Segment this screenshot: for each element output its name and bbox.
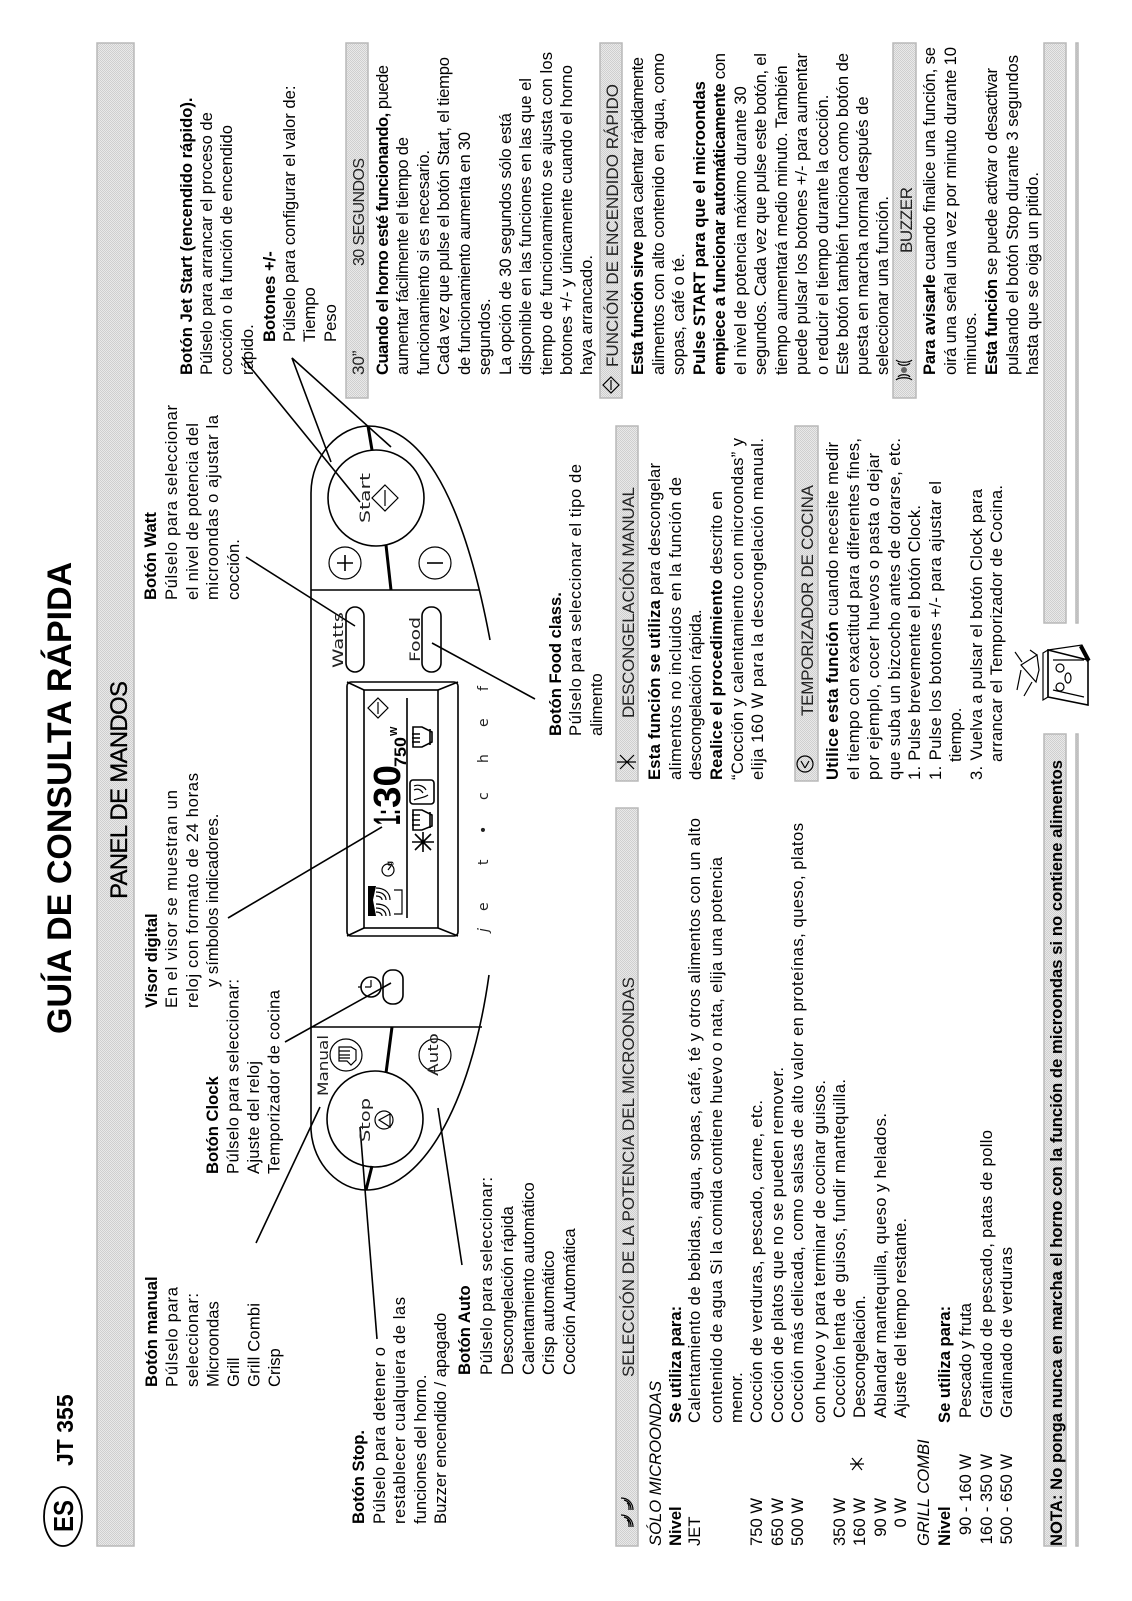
heading: panel de mandos: PANEL DE MANDOS (106, 681, 133, 899)
panel labels (316, 472, 442, 1142)
block: boton food class: Botón Food class. (546, 592, 565, 736)
text: temporizador de cocina: 1. Pulse brevemente el botón Clock. (905, 505, 924, 780)
table: solo microondas: 650 W (768, 1498, 787, 1546)
text: temporizador de cocina: el tiempo con exactitud para diferentes fines, (844, 438, 863, 780)
leader: boton manual (256, 1107, 320, 1243)
text: 30 segundos (373, 52, 596, 375)
section bar: seleccion de la potencia (616, 808, 638, 1546)
table: solo microondas (646, 818, 910, 1546)
manual button (330, 1039, 362, 1071)
text: descongelacion manual: elija 160 W para la descongelación manual. (748, 438, 767, 780)
block: boton auto: Cocción Automática (560, 1228, 579, 1375)
table: grill combi: Gratinado de pescado, patas de pollo (977, 1130, 996, 1418)
text: 30 segundos: Cuando el horno esté funcionando, puede (373, 65, 392, 375)
table: solo microondas: 90 W (871, 1498, 890, 1537)
brand letters on panel: h (476, 754, 492, 763)
display: dish icon left (412, 810, 432, 830)
leader: boton auto (438, 1108, 462, 1265)
text: temporizador de cocina: arrancar el Temporizador de Cocina. (987, 485, 1006, 762)
table: solo microondas: 500 W (788, 1498, 807, 1546)
leader: boton food (432, 643, 535, 699)
icon: clock in section bar (797, 756, 813, 772)
text: 30 segundos: La opción de 30 segundos sólo está (496, 112, 515, 375)
section heading: 30 segundos: 30” (349, 350, 368, 375)
block: boton auto: Calentamiento automático (519, 1182, 538, 1375)
table: solo microondas: contenido de agua Si la comida contiene huevo o nata, elija una potencia (707, 856, 726, 1423)
section heading: 30 segundos: 30 SEGUNDOS (351, 158, 368, 266)
table: solo microondas: 350 W (830, 1498, 849, 1546)
table: solo microondas: Descongelación. (850, 1295, 869, 1418)
icon: defrost asterisk in section bar (617, 755, 636, 769)
block: boton manual: seleccionar: (183, 1293, 202, 1387)
table: grill combi: Nivel (935, 1506, 954, 1546)
text: buzzer: minutos. (961, 312, 980, 375)
table: solo microondas: Cocción más delicada, como salsas de alto valor en proteínas, queso, platos (788, 823, 807, 1423)
panel labels: Start (358, 472, 374, 523)
block: boton clock: Botón Clock (203, 1076, 222, 1174)
control panel diagram (228, 357, 535, 1339)
table: grill combi: 500 - 650 W (997, 1454, 1016, 1544)
block: visor digital: y símbolos indicadores. (203, 814, 222, 987)
block: boton auto: Púlselo para seleccionar: (477, 1177, 496, 1375)
note: NOTA: No ponga nunca en marcha el horno con la función de microondas si no contiene alimentos (1047, 760, 1066, 1546)
display readout: W (389, 726, 400, 736)
text: temporizador de cocina: 3. Vuelva a pulsar el botón Clock para (967, 488, 986, 780)
section heading: 30 segundos (349, 158, 368, 375)
table: grill combi: GRILL COMBI (914, 1439, 933, 1546)
text: funcion de encendido rapido: Esta función sirve para calentar rápidamente (628, 57, 647, 375)
table: solo microondas: Calentamiento de bebidas, agua, sopas, café, té y otros alimentos con un alto (685, 818, 704, 1423)
plus button (329, 547, 361, 579)
thin stripe: lower segment (1076, 734, 1078, 1546)
block: boton food class: alimento (587, 673, 606, 736)
display readout: 1: (367, 809, 409, 825)
block: botones mas menos: Botones +/- (260, 251, 279, 342)
section bar: buzzer (893, 43, 916, 398)
block: botones mas menos: Tiempo (300, 287, 319, 342)
block: boton watt: microondas o ajustar la (203, 414, 222, 600)
note bar: upper segment (1044, 43, 1066, 623)
block: boton auto (455, 1177, 579, 1375)
header bar: panel de mandos (97, 43, 134, 1546)
block: boton stop: funciones del horno. (411, 1375, 430, 1524)
text: 30 segundos: tiempo de funcionamiento se ajusta con los (537, 52, 556, 375)
table: solo microondas: 750 W (747, 1498, 766, 1546)
icon: buzzer in section bar (896, 360, 912, 380)
text: descongelacion manual (645, 437, 767, 780)
block: boton stop: Buzzer encendido / apagado (431, 1313, 450, 1524)
block: boton jet start: Púlselo para arrancar el proceso de (197, 112, 216, 375)
table: solo microondas: Cocción de verduras, pescado, carne, etc. (747, 1100, 766, 1423)
title: GUÍA DE CONSULTA RÁPIDA (41, 562, 79, 1034)
block: visor digital (142, 773, 222, 1008)
text: funcion de encendido rapido: segundos. Cada vez que pulse este botón, el (751, 53, 770, 375)
block: boton manual: Crisp (265, 1348, 284, 1387)
text: buzzer: oirá una señal una vez por minuto durante 10 (941, 47, 960, 375)
text: 30 segundos: aumentar fácilmente el tiempo de (393, 137, 412, 375)
brand letters on panel: j (476, 928, 492, 934)
panel outline (311, 426, 490, 1190)
block: boton manual (142, 1276, 284, 1387)
text: funcion de encendido rapido: empiece a funcionar automáticamente con (710, 53, 729, 375)
text: temporizador de cocina: Utilice esta función cuando necesite medir (823, 442, 842, 780)
text: buzzer (920, 47, 1042, 375)
text: 30 segundos: Cada vez que pulse el botón Start, el tiempo (434, 57, 453, 375)
display readout: g (385, 861, 394, 866)
table: solo microondas: Ajuste del tiempo restante. (891, 1218, 910, 1418)
brand letters on panel: e (476, 902, 492, 911)
block: boton clock (203, 979, 284, 1174)
block: boton manual: Grill (224, 1358, 243, 1387)
section heading: seleccion de la potencia: SELECCIÓN DE LA POTENCIA DEL MICROONDAS (619, 977, 638, 1377)
block: visor digital: Visor digital (142, 913, 161, 1008)
language badge ES (44, 1487, 82, 1546)
table: solo microondas: Se utiliza para: (666, 1306, 685, 1423)
text: funcion de encendido rapido: Este botón también funciona como botón de (833, 53, 852, 375)
text: buzzer: Para avisarle cuando finalice una función, se (920, 47, 939, 375)
block: boton jet start: cocción o la función de encendido (217, 125, 236, 375)
table: solo microondas: con huevo y para terminar de cocinar guisos. (810, 1080, 829, 1423)
table: solo microondas: menor. (727, 1372, 746, 1423)
panel labels: Stop (358, 1098, 374, 1142)
block: visor digital: En el visor se muestran un (162, 790, 181, 1008)
panel labels: Manual (316, 1035, 332, 1096)
block: visor digital: reloj con formato de 24 horas (183, 773, 202, 1008)
text: funcion de encendido rapido: o reducir el tiempo durante la cocción. (813, 95, 832, 375)
panel labels: Watts (331, 612, 347, 668)
text: descongelacion manual: Realice el procedimiento descrito en (707, 491, 726, 780)
text: buzzer: pulsando el botón Stop durante 3 segundos (1003, 55, 1022, 375)
panel labels: Food (408, 617, 424, 662)
icon: microwave with book (1015, 645, 1090, 705)
block: boton clock: Temporizador de cocina (264, 989, 284, 1174)
language code ES: ES (48, 1500, 79, 1532)
text: funcion de encendido rapido: alimentos con alto contenido en agua, como (649, 53, 668, 375)
block: botones mas menos (260, 86, 340, 342)
block: botones mas menos: Peso (321, 304, 340, 342)
text: 30 segundos: de funcionamiento aumenta en 30 (455, 132, 474, 375)
section bar: descongelacion manual (616, 426, 638, 781)
block: boton watt: el nivel de potencia del (183, 423, 202, 600)
food button (422, 607, 441, 672)
block: boton manual: Microondas (204, 1301, 222, 1387)
text: funcion de encendido rapido (628, 53, 892, 375)
text: buzzer: Esta función se puede activar o desactivar (982, 68, 1001, 375)
block: boton manual: Púlselo para (162, 1286, 182, 1387)
brand letters on panel: c (476, 792, 492, 800)
brand letters on panel: • (476, 826, 492, 834)
text: funcion de encendido rapido: seleccionar una función. (873, 196, 892, 375)
block: boton clock: Púlselo para seleccionar: (224, 979, 242, 1174)
leader: boton jet start (242, 357, 360, 502)
display: microwave box icon (410, 780, 434, 804)
block: boton watt (141, 405, 243, 600)
leader: visor digital (228, 827, 382, 918)
table: solo microondas: Nivel (666, 1506, 685, 1546)
icon: waves in section bar (621, 1498, 633, 1527)
block: boton jet start: Botón Jet Start (encendido rápido). (177, 98, 196, 375)
brand letters on panel: e (476, 718, 492, 727)
display readout: 750 (391, 737, 410, 767)
brand letters on panel: f (476, 685, 492, 691)
display readout: 30 (367, 765, 409, 808)
text: descongelacion manual: “Cocción y calentamiento con microondas” y (728, 437, 747, 780)
text: descongelacion manual: alimentos no incluidos en la función de (666, 477, 685, 780)
minus button (419, 547, 451, 579)
display window (347, 682, 458, 936)
table: solo microondas: Ablandar mantequilla, queso y helados. (871, 1113, 890, 1418)
auto button (419, 1039, 451, 1071)
text: 30 segundos: segundos. (475, 298, 494, 375)
block: botones mas menos: Púlselo para configurar el valor de: (280, 86, 299, 342)
block: boton food class: Púlselo para seleccionar el tipo de (566, 464, 585, 736)
text: funcion de encendido rapido: puesta en marcha normal después de (853, 96, 872, 375)
block: boton jet start (177, 98, 257, 375)
table: grill combi: Se utiliza para: (935, 1306, 954, 1423)
note bar: lower segment (1044, 734, 1066, 1546)
table: solo microondas: Cocción lenta de guisos, fundir mantequilla. (830, 1079, 849, 1418)
section bar: funcion de encendido rapido (600, 43, 622, 398)
text: descongelacion manual: descongelación rápida. (686, 609, 705, 780)
text: buzzer: hasta que se oiga un pitido. (1023, 172, 1042, 375)
block: boton watt: Botón Watt (141, 512, 160, 600)
section bar: temporizador de cocina (795, 426, 818, 781)
section heading: funcion de encendido rapido: FUNCIÓN DE ENCENDIDO RÁPIDO (603, 84, 622, 367)
block: boton stop: restablecer cualquiera de las (390, 1297, 409, 1524)
leader: botones mas menos (292, 358, 391, 462)
block: boton manual: Grill Combi (244, 1303, 264, 1387)
table: grill combi (914, 1130, 1016, 1546)
section heading: buzzer: BUZZER (897, 187, 916, 253)
display readout (367, 726, 410, 866)
leader: boton watt (246, 557, 355, 626)
icon: start diamond in section bar (603, 377, 619, 393)
block: boton watt: cocción. (224, 539, 243, 600)
text: temporizador de cocina (823, 438, 1006, 780)
section bar: 30 segundos (346, 43, 368, 398)
block: boton manual: Botón manual (142, 1276, 161, 1387)
icon: defrost asterisk in table (850, 1458, 864, 1470)
text: descongelacion manual: Esta función se utiliza para descongelar (645, 463, 664, 780)
display: waves icon (368, 886, 402, 916)
text: temporizador de cocina: por ejemplo, cocer huevos o pasta o dejar (864, 453, 883, 780)
table: solo microondas: SÓLO MICROONDAS (646, 1381, 665, 1546)
text: 30 segundos: disponible en las funciones en las que el (516, 78, 535, 375)
text: funcion de encendido rapido: Pulse START para que el microondas (690, 81, 709, 375)
panel labels: Auto (426, 1033, 442, 1076)
block: boton watt: Púlselo para seleccionar (162, 405, 181, 600)
text: funcion de encendido rapido: puede pulsar los botones +/- para aumentar (792, 53, 811, 375)
block: boton auto: Crisp automático (539, 1250, 558, 1375)
display: dish icon right (412, 727, 432, 747)
text: temporizador de cocina: tiempo. (946, 708, 965, 762)
table: grill combi: 160 - 350 W (977, 1454, 996, 1544)
table: solo microondas: Cocción de platos que no se pueden remover. (768, 1067, 787, 1423)
block: boton food class (546, 464, 606, 736)
section heading: temporizador de cocina: TEMPORIZADOR DE COCINA (798, 484, 817, 716)
table: grill combi: 90 - 160 W (956, 1454, 975, 1535)
table: grill combi: Gratinado de verduras (997, 1247, 1016, 1418)
leader: boton clock (285, 983, 391, 1042)
text: funcion de encendido rapido: sopas, café o té. (669, 253, 688, 375)
table: solo microondas: JET (685, 1516, 704, 1546)
text: temporizador de cocina: 1. Pulse los botones +/- para ajustar el (926, 481, 945, 780)
brand letters on panel: t (476, 859, 492, 865)
display: defrost star (412, 832, 434, 852)
start button (328, 450, 424, 546)
clock button (358, 970, 403, 1004)
display: start diamond (368, 698, 388, 718)
display: timer icon (382, 864, 394, 876)
brand letters on panel (476, 685, 492, 934)
section heading: descongelacion manual: DESCONGELACIÓN MANUAL (619, 487, 638, 718)
text: 30 segundos: haya arrancado. (577, 255, 596, 375)
table: grill combi: Pescado y fruta (956, 1302, 975, 1418)
text: 30 segundos: funcionamiento si es necesario. (414, 150, 433, 375)
leader: boton stop (360, 1127, 377, 1339)
text: funcion de encendido rapido: el nivel de potencia máximo durante 30 (731, 86, 750, 375)
stop button (327, 1071, 423, 1167)
block: boton stop (349, 1297, 450, 1524)
model name: JT 355 (52, 1394, 78, 1466)
text: funcion de encendido rapido: tiempo aumentará medio minuto. También (772, 65, 791, 375)
watts button (346, 607, 364, 672)
text: 30 segundos: botones +/- y únicamente cuando el horno (557, 65, 576, 375)
block: boton clock: Ajuste del reloj (244, 1061, 263, 1174)
block: boton auto: Descongelación rápida (498, 1205, 517, 1375)
text: temporizador de cocina: que suba un bizcocho antes de dorarse, etc. (885, 438, 904, 780)
block: boton stop: Botón Stop. (349, 1430, 368, 1524)
table: solo microondas: 0 W (891, 1498, 910, 1528)
table: solo microondas: 160 W (850, 1498, 869, 1546)
block: boton jet start: rápido. (238, 324, 257, 375)
block: boton stop: Púlselo para detener o (370, 1347, 389, 1524)
thin stripe: upper segment (1076, 43, 1078, 623)
block: boton auto: Botón Auto (455, 1285, 474, 1375)
